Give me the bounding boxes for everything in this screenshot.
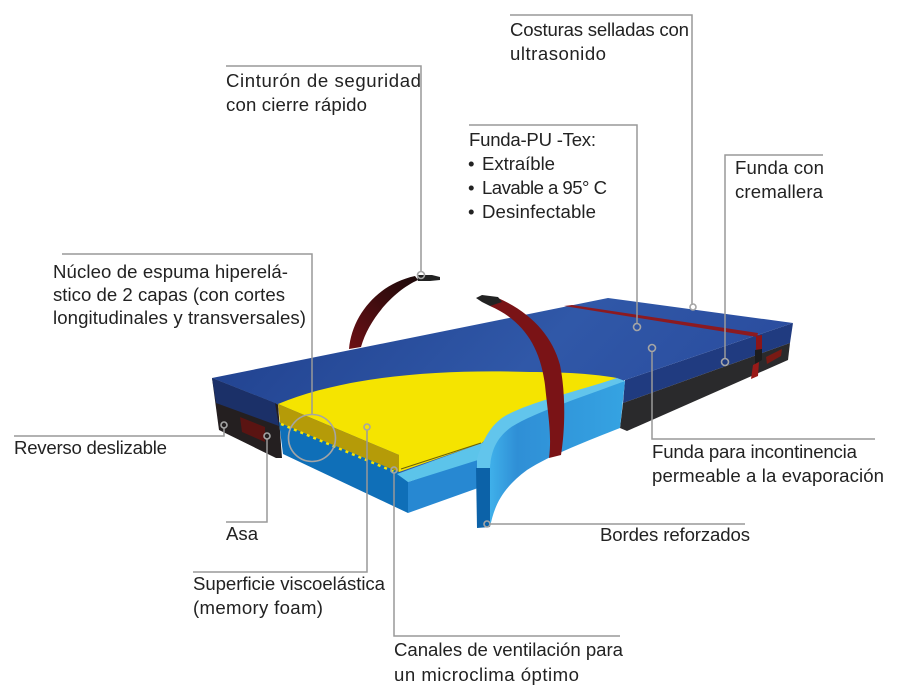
label: núcleo de espuma bbox=[53, 254, 336, 462]
label: bordes reforzados: Bordes reforzados bbox=[600, 524, 750, 545]
front safety strap bbox=[490, 298, 564, 458]
strap buckle bbox=[476, 295, 502, 306]
label: reverso deslizable: Reverso deslizable bbox=[14, 437, 167, 458]
mattress illustration bbox=[212, 275, 793, 528]
flap top rim bbox=[477, 378, 625, 468]
label: asa: Asa bbox=[226, 523, 259, 544]
ventilation dots bbox=[281, 424, 397, 473]
label: funda PU-Tex: • bbox=[468, 153, 475, 174]
label: reverso deslizable bbox=[14, 422, 227, 458]
label: costuras selladas: Costuras selladas con bbox=[510, 19, 689, 40]
red strap on side bbox=[756, 335, 762, 352]
foam base front bbox=[279, 422, 408, 513]
back buckle bbox=[417, 275, 440, 281]
label: cinturón: Cinturón de seguridad bbox=[226, 70, 421, 91]
label: asa bbox=[226, 433, 270, 544]
label: funda PU-Tex: Funda-PU -Tex: bbox=[469, 129, 596, 150]
label: funda para incontinencia: permeable a la evaporación bbox=[652, 465, 884, 486]
label: funda con cremallera bbox=[722, 155, 824, 366]
label: cinturón: con cierre rápido bbox=[226, 94, 367, 115]
foam base top strip bbox=[397, 438, 494, 482]
label: funda PU-Tex: • bbox=[468, 177, 475, 198]
label: superficie viscoelástica bbox=[193, 424, 386, 618]
label: cinturón bbox=[226, 66, 424, 278]
red strap across top bbox=[564, 305, 758, 337]
back safety strap bbox=[349, 276, 418, 349]
flap cut edge bbox=[476, 468, 490, 528]
label: funda con cremallera: Funda con bbox=[735, 157, 824, 178]
right side face bbox=[623, 323, 793, 403]
label: núcleo de espuma: longitudinales y transversales) bbox=[53, 307, 306, 328]
side buckle bbox=[755, 349, 762, 364]
label: funda PU-Tex: • bbox=[468, 201, 475, 222]
handle, left bbox=[240, 417, 265, 442]
top cover bbox=[212, 298, 793, 482]
label: funda PU-Tex bbox=[468, 125, 640, 330]
label: núcleo de espuma: stico de 2 capas (con cortes bbox=[53, 284, 285, 305]
label: canales de ventilación bbox=[391, 467, 624, 685]
label: funda con cremallera: cremallera bbox=[735, 181, 824, 202]
label: funda para incontinencia bbox=[648, 344, 884, 486]
handle, right bbox=[766, 349, 782, 364]
label: superficie viscoelástica: Superficie viscoelástica bbox=[193, 573, 386, 594]
label: superficie viscoelástica: (memory foam) bbox=[193, 597, 323, 618]
label: núcleo de espuma: Núcleo de espuma hiperelá- bbox=[53, 261, 288, 282]
label: canales de ventilación: un microclima óptimo bbox=[394, 664, 579, 685]
yellow core front bbox=[278, 404, 399, 472]
yellow core top bbox=[278, 371, 617, 472]
label: funda PU-Tex: Desinfectable bbox=[482, 201, 596, 222]
label: canales de ventilación: Canales de ventilación para bbox=[394, 639, 624, 660]
left side face bbox=[212, 378, 282, 458]
label: bordes reforzados bbox=[484, 521, 750, 545]
label: costuras selladas bbox=[510, 15, 696, 310]
label: funda PU-Tex: Lavable a 95° C bbox=[482, 177, 607, 198]
red strap end bbox=[751, 362, 759, 379]
flap, reinforced edge bbox=[490, 381, 625, 527]
label: funda PU-Tex: Extraíble bbox=[482, 153, 555, 174]
label: costuras selladas: ultrasonido bbox=[510, 43, 606, 64]
label: funda para incontinencia: Funda para incontinencia bbox=[652, 441, 858, 462]
